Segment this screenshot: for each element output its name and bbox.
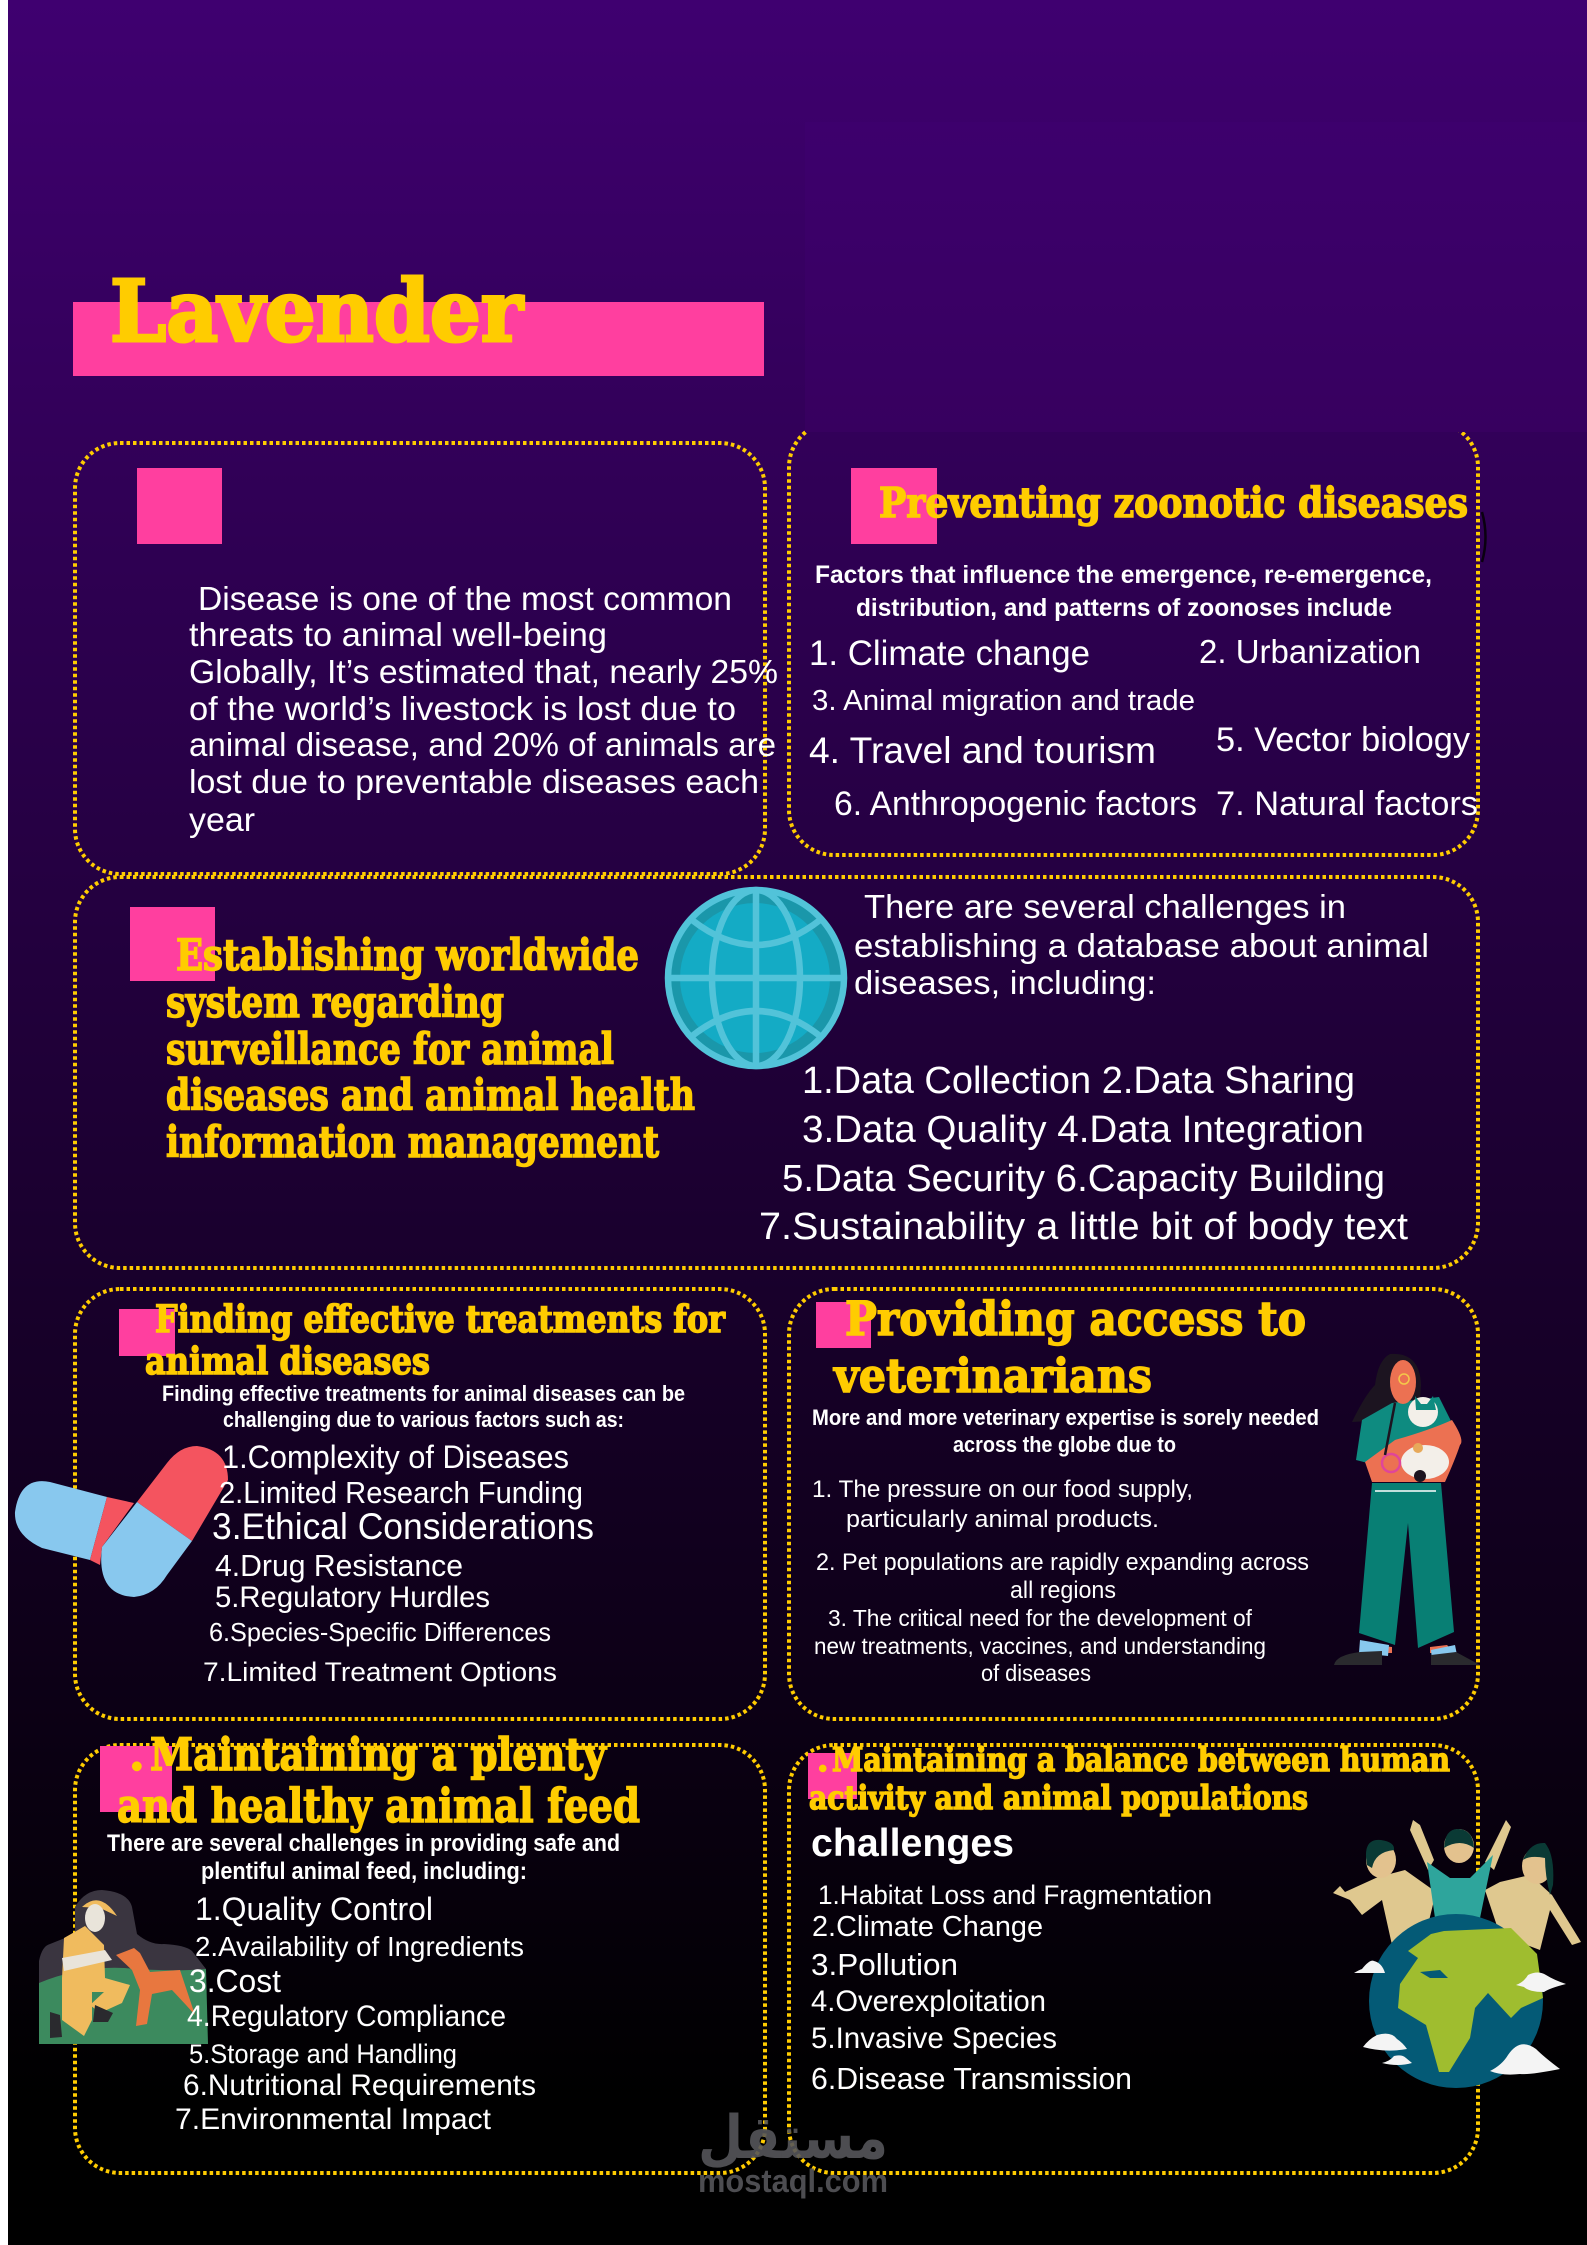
body text: Globally, It’s estimated that, nearly 25% [189,653,778,690]
database challenges list: 7.Sustainability a little bit of body text [759,1206,1408,1248]
panel: access to veterinarians [789,1289,1480,1719]
balance challenges list [811,1880,1212,2096]
reasons list: all regions [1010,1577,1116,1604]
panel: human and animal balance [789,1740,1581,2173]
panel: disease threats [75,443,778,874]
panel frame [75,443,765,874]
pink accent square [100,1746,172,1812]
balance challenges list: 2.Climate Change [812,1911,1043,1943]
panel frame [75,1745,765,2173]
pink accent square [119,1309,175,1356]
database challenges intro: establishing a database about animal [854,927,1429,964]
balance challenges list: 6.Disease Transmission [811,2061,1132,2096]
treatment list [203,1439,594,1687]
title banner [73,262,764,376]
body text: of the world’s livestock is lost due to [189,690,736,727]
feed challenges list: 1.Quality Control [195,1891,433,1927]
panel: surveillance and database [75,877,1478,1268]
illustration: people on globe [1333,1820,1581,2088]
factor list: 1. Climate change [809,634,1090,673]
intro text: More and more veterinary expertise is sorely needed [812,1405,1319,1430]
treatment list: 6.Species-Specific Differences [209,1617,551,1647]
heading [833,1292,1306,1404]
database challenges intro: There are several challenges in [864,888,1346,925]
feed challenges list: 7.Environmental Impact [175,2103,492,2136]
intro text [107,1830,620,1885]
icon: globe [668,890,844,1066]
feed challenges list: 4.Regulatory Compliance [187,2000,506,2033]
body text: animal disease, and 20% of animals are [189,726,776,763]
pink accent square [130,907,215,981]
feed challenges list: 6.Nutritional Requirements [183,2069,536,2102]
subheading: challenges [811,1822,1014,1865]
factor list [809,633,1478,823]
illustration: farmer feeding deer [39,1890,208,2044]
icon: capsules [15,1446,228,1597]
watermark: mostaql: مستقل [698,2103,888,2173]
heading: animal diseases [145,1339,430,1383]
feed challenges list: 3.Cost [189,1963,281,1999]
illustration: veterinarian holding cat [1334,1354,1480,1665]
intro text: There are several challenges in providing safe and [107,1830,620,1857]
reasons list: new treatments, vaccines, and understanding [814,1633,1266,1659]
heading: Maintaining a plenty [150,1728,608,1781]
database challenges list [759,1060,1408,1248]
feed challenges list [175,1891,536,2136]
heading: and healthy animal feed [117,1779,640,1834]
reasons list [812,1476,1309,1686]
feed challenges list: 5.Storage and Handling [189,2039,457,2069]
factor list: 4. Travel and tourism [809,730,1156,771]
heading [117,1728,640,1834]
intro text: across the globe due to [953,1432,1176,1457]
heading: surveillance for animal [166,1025,614,1075]
panel: animal feed [39,1728,765,2173]
panel: effective treatments [15,1289,765,1719]
body text: threats to animal well-being [189,616,607,653]
intro text: Finding effective treatments for animal diseases can be [162,1381,685,1406]
intro text: challenging due to various factors such as: [223,1407,624,1432]
reasons list: particularly animal products. [846,1506,1159,1533]
balance challenges list: 3.Pollution [811,1947,958,1982]
panel frame [75,877,1478,1268]
treatment list: 2.Limited Research Funding [219,1475,583,1510]
balance challenges list: 1.Habitat Loss and Fragmentation [818,1880,1212,1910]
heading: information management [166,1118,659,1168]
factor list: 7. Natural factors [1216,785,1478,823]
factor list: 3. Animal migration and trade [812,685,1195,717]
factor list: 5. Vector biology [1216,721,1470,759]
heading: system regarding [166,978,504,1028]
factor list: 6. Anthropogenic factors [834,785,1197,823]
balance challenges list: 4.Overexploitation [811,1985,1046,2018]
intro text: distribution, and patterns of zoonoses include [856,594,1392,622]
body text [189,580,778,838]
heading [166,931,695,1168]
treatment list: 3.Ethical Considerations [212,1506,594,1547]
intro text: plentiful animal feed, including: [201,1858,527,1885]
pink accent square [137,468,222,544]
heading: Establishing worldwide [176,931,639,981]
body text: year [189,801,255,838]
treatment list: 1.Complexity of Diseases [222,1439,569,1475]
intro text [162,1381,685,1432]
heading [809,1740,1450,1817]
balance challenges list: 5.Invasive Species [811,2022,1057,2055]
panel frame [789,422,1478,855]
watermark: mostaql [698,2103,888,2199]
treatment list: 7.Limited Treatment Options [203,1657,557,1687]
heading: Providing access to [845,1292,1306,1347]
reasons list: 2. Pet populations are rapidly expanding across [816,1549,1309,1576]
heading: veterinarians [833,1349,1152,1404]
watermark: mostaql: mostaql.com [698,2163,888,2199]
factor list: 2. Urbanization [1199,633,1421,670]
heading: diseases and animal health [166,1071,695,1121]
reasons list: 3. The critical need for the development of [828,1605,1253,1631]
body text: lost due to preventable diseases each [189,763,759,800]
title: Lavender [110,262,524,362]
title bar [73,302,764,376]
treatment list: 4.Drug Resistance [215,1548,463,1583]
database challenges intro: diseases, including: [854,964,1156,1001]
database challenges intro [854,888,1429,1001]
database challenges list: 1.Data Collection 2.Data Sharing [802,1060,1355,1102]
panel frame [789,1289,1478,1719]
heading: Finding effective treatments for [155,1297,725,1341]
pink accent square [851,468,937,544]
reasons list: 1. The pressure on our food supply, [812,1476,1193,1503]
panel frame [789,1745,1478,2173]
database challenges list: 5.Data Security 6.Capacity Building [782,1158,1385,1200]
panel: preventing zoonotic diseases [789,422,1478,855]
reasons list: of diseases [981,1660,1091,1686]
pink accent square [808,1753,857,1799]
pink accent square [816,1302,871,1348]
heading [145,1297,725,1383]
treatment list: 5.Regulatory Hurdles [215,1581,490,1614]
heading: activity and animal populations [809,1778,1308,1817]
top-right dark rectangle [805,122,1587,432]
heading: Maintaining a balance between human [832,1740,1450,1779]
intro text [812,1405,1319,1457]
panel frame [75,1289,765,1719]
heading: . [817,1740,828,1779]
intro text: Factors that influence the emergence, re-emergence, [815,561,1432,589]
intro text [815,561,1432,622]
body text: Disease is one of the most common [198,580,732,617]
database challenges list: 3.Data Quality 4.Data Integration [802,1109,1364,1151]
heading: Preventing zoonotic diseases [879,479,1468,527]
heading: . [129,1728,145,1781]
small dark arc beside panel [1482,512,1486,562]
feed challenges list: 2.Availability of Ingredients [195,1931,524,1962]
